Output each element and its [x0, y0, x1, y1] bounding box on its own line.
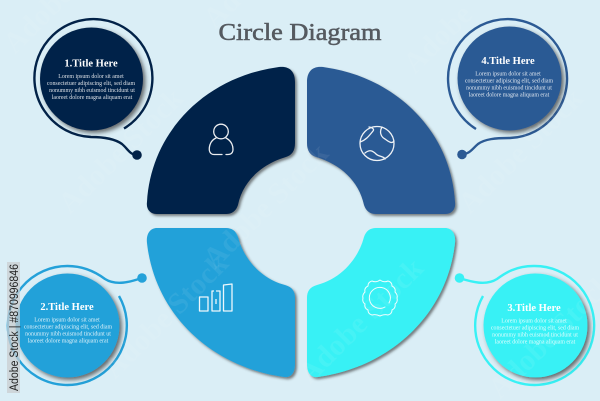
callout 3 body text: nonummy nibh euismod tincidunt ut: [492, 332, 578, 338]
icon: gear: [363, 280, 397, 316]
callout 3: [455, 266, 594, 385]
segment 4: mid blue quadrant: [307, 67, 455, 214]
callout 3 body text: Lorem ipsum dolor sit amet: [501, 318, 567, 324]
callout 2 body text: nonummy nibh euismod tincidunt ut: [25, 332, 111, 338]
callout 4 body text: laoreet dolore magna aliquam erat: [469, 92, 550, 98]
callout 2 body text: consectetuer adipiscing elit, sed diam: [24, 324, 112, 330]
callout 4 connector ring: [448, 19, 567, 154]
callout 2 body text: [24, 318, 112, 344]
callout 4: [448, 19, 567, 159]
callout 3 body text: laoreet dolore magna aliquam erat: [495, 340, 576, 346]
callout 1 heading: 1.Title Here: [64, 58, 118, 70]
callout 2 heading: 2.Title Here: [40, 302, 94, 313]
callout 4 circle: [458, 26, 562, 130]
callout 4 body text: [465, 72, 553, 98]
watermark: Adobe Stock: [197, 136, 335, 275]
callout 1: [34, 19, 152, 160]
watermark: Adobe Stock: [452, 81, 590, 220]
watermark: Adobe: [397, 0, 479, 80]
callout 4 heading: 4.Title Here: [481, 56, 535, 67]
segment 3: cyan quadrant: [307, 228, 455, 377]
callout 2 dot: [137, 273, 147, 283]
callout 3 heading: 3.Title Here: [507, 303, 561, 314]
callout 3 body text: [491, 318, 579, 346]
callout 2: [8, 266, 147, 385]
callout 2 body text: laoreet dolore magna aliquam erat: [28, 338, 109, 344]
callout 3 connector ring: [459, 266, 594, 385]
segment 2: sky blue quadrant: [147, 228, 295, 377]
credit strip: Adobe Stock | #870996846: [9, 264, 21, 391]
callout 1 body text: nonummy nibh euismod tincidunt ut: [49, 88, 135, 94]
callout 1 body text: consectetuer adipiscing elit, sed diam: [47, 81, 135, 87]
watermark: Adobe Stock: [52, 81, 190, 220]
watermark: Adobe Stock: [97, 246, 235, 385]
callout 4 body text: Lorem ipsum dolor sit amet: [475, 72, 541, 78]
callout 3 dot: [455, 273, 464, 283]
callout 4 body text: consectetuer adipiscing elit, sed diam: [465, 78, 553, 84]
callout 2 connector ring: [8, 266, 142, 385]
icon: bar chart: [200, 284, 232, 311]
callout 3 body text: consectetuer adipiscing elit, sed diam: [491, 326, 579, 332]
callout 1 body text: [47, 74, 135, 101]
callout 2 circle: [16, 274, 120, 378]
callout 3 circle: [484, 274, 588, 378]
callout 1 dot: [132, 150, 142, 160]
callout 1 circle: [40, 28, 143, 130]
callout 4 body text: nonummy nibh euismod tincidunt ut: [466, 86, 552, 92]
callout 4 dot: [457, 150, 467, 159]
icon: globe: [360, 126, 394, 160]
callout 2 body text: Lorem ipsum dolor sit amet: [34, 318, 100, 324]
icon: person: [209, 124, 233, 154]
callout 1 body text: Lorem ipsum dolor sit amet: [58, 74, 124, 80]
title: Circle Diagram: [218, 20, 382, 46]
segment 1: dark navy quadrant: [147, 67, 295, 214]
watermark: Adobe Stock: [292, 251, 430, 390]
callout 1 body text: laoreet dolore magna aliquam erat: [52, 95, 133, 101]
callout 1 connector ring: [34, 19, 152, 155]
